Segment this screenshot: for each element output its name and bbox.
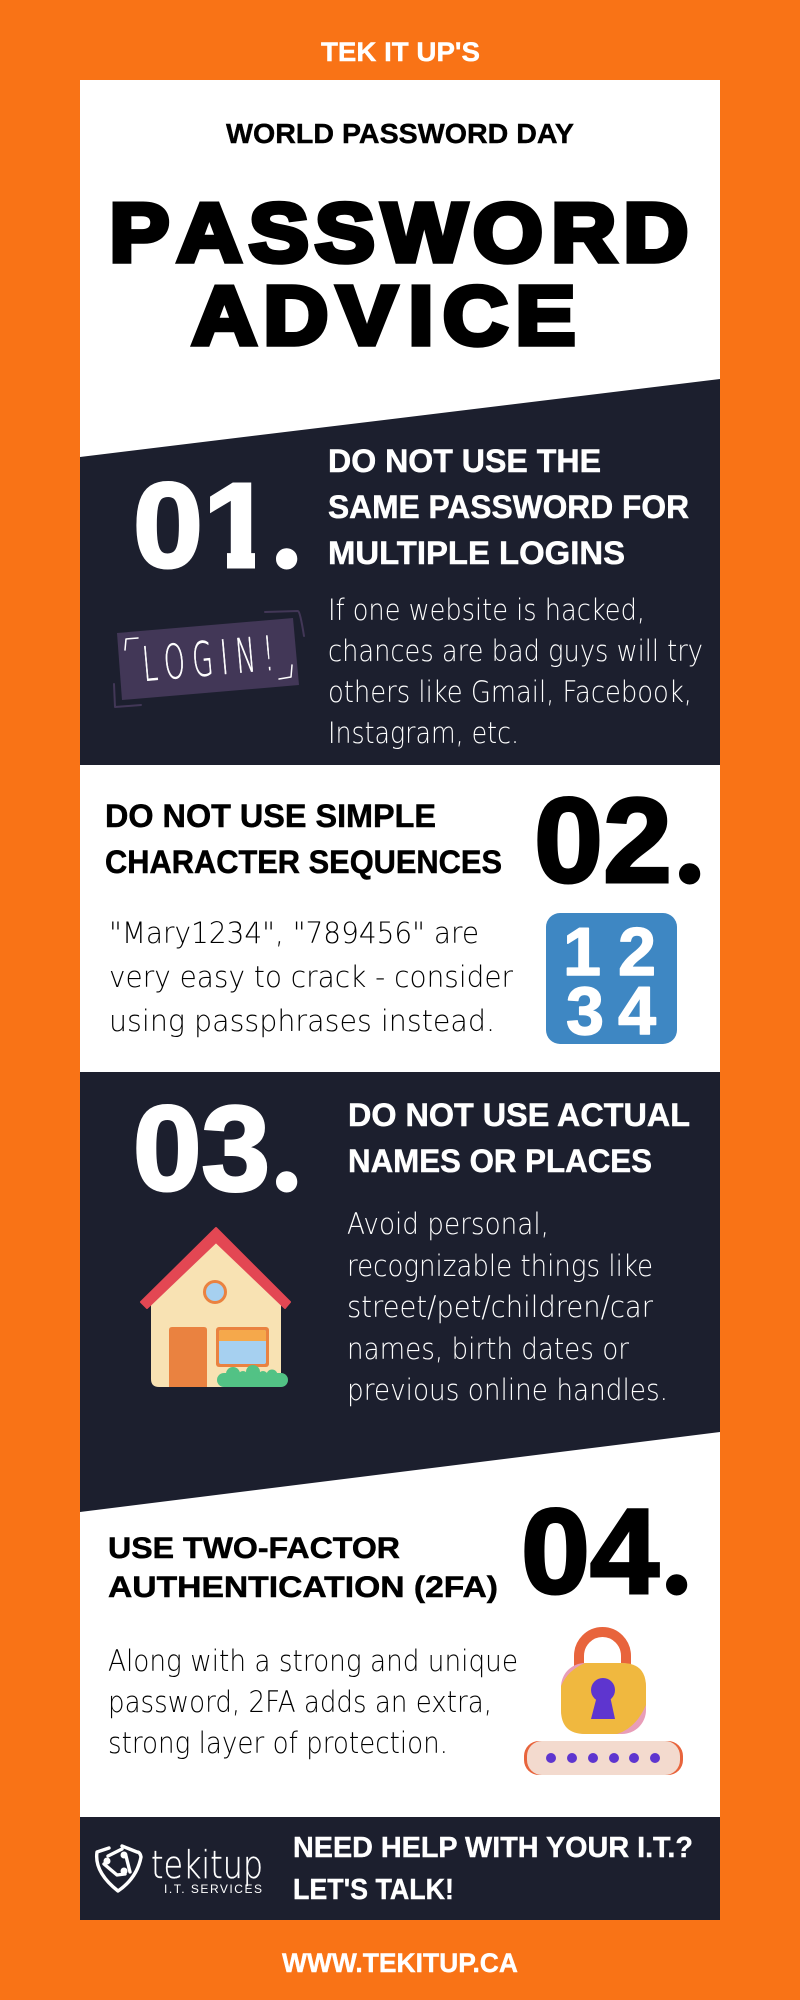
footer call to action: NEED HELP WITH YOUR I.T.?	[293, 1832, 693, 1864]
body 01: others like Gmail, Facebook,	[328, 675, 692, 709]
body 04: password, 2FA adds an extra,	[108, 1685, 492, 1719]
body 03: previous online handles.	[347, 1373, 668, 1407]
icon: padlock and password field	[524, 1632, 683, 1775]
logo: tekitup	[97, 1843, 263, 1896]
heading 04: USE TWO-FACTOR	[108, 1532, 400, 1565]
white main panel	[80, 80, 720, 1920]
number 03: .	[271, 1080, 302, 1218]
body 01: chances are bad guys will try	[328, 634, 703, 668]
heading 02: DO NOT USE SIMPLE	[105, 798, 436, 834]
panel background	[80, 379, 720, 765]
body 02: very easy to crack - consider	[109, 960, 513, 994]
panel background	[80, 1072, 720, 1512]
logo: tekitup: I.T. SERVICES	[164, 1882, 262, 1896]
icon: login sign: LOGIN!	[140, 627, 276, 693]
body 03: Avoid personal,	[347, 1207, 549, 1241]
body 03	[347, 1207, 668, 1407]
icon: house	[141, 1228, 290, 1387]
heading 03: DO NOT USE ACTUAL	[348, 1097, 690, 1133]
number 04: 04	[521, 1483, 659, 1619]
icon: 1234 tile: 1	[563, 914, 601, 990]
number 04: .	[661, 1483, 692, 1621]
panel: tip 01	[80, 379, 720, 765]
panel: tip 03	[80, 1072, 720, 1512]
footer bar	[80, 1817, 720, 1920]
body 04: strong layer of protection.	[108, 1726, 448, 1760]
body 03: recognizable things like	[347, 1249, 653, 1283]
subtitle: WORLD PASSWORD DAY	[226, 118, 574, 149]
bottom website link: WWW.TEKITUP.CA	[282, 1948, 518, 1978]
body 02	[109, 916, 513, 1038]
heading 02	[105, 798, 502, 880]
header block	[110, 118, 688, 362]
icon: login sign	[114, 611, 304, 707]
number 01	[136, 481, 298, 570]
title line 1: PASSWORD	[110, 187, 688, 279]
body 01	[328, 593, 703, 750]
body 04: Along with a strong and unique	[108, 1644, 518, 1678]
number 02: 02	[534, 772, 672, 908]
body 01: Instagram, etc.	[328, 716, 519, 750]
body 01: If one website is hacked,	[328, 593, 645, 627]
heading 01: SAME PASSWORD FOR	[328, 489, 689, 525]
panel: tip 04	[108, 1483, 692, 1775]
number 02: .	[674, 772, 705, 910]
logo: tekitup: tekitup	[151, 1843, 263, 1887]
footer call to action	[293, 1832, 693, 1906]
icon: 1234 tile	[546, 913, 677, 1049]
icon: 1234 tile: 3	[566, 973, 604, 1049]
body 02: using passphrases instead.	[109, 1004, 495, 1038]
icon: 1234 tile: 4	[618, 973, 656, 1049]
heading 01: DO NOT USE THE	[328, 443, 601, 479]
heading 02: CHARACTER SEQUENCES	[105, 844, 502, 880]
body 03: street/pet/children/car	[347, 1290, 653, 1324]
body 03: names, birth dates or	[347, 1332, 629, 1366]
heading 01: MULTIPLE LOGINS	[328, 535, 625, 571]
icon: 1234 tile: 2	[618, 914, 656, 990]
heading 03: NAMES OR PLACES	[348, 1143, 652, 1179]
number 01: .	[271, 457, 302, 595]
body 02: "Mary1234", "789456" are	[109, 916, 479, 950]
number 03: 03	[133, 1080, 270, 1216]
heading 04	[108, 1532, 498, 1604]
top label: brand name: TEK IT UP'S	[321, 37, 480, 67]
heading 01	[328, 443, 689, 571]
heading 03	[348, 1097, 690, 1179]
heading 04: AUTHENTICATION (2FA)	[108, 1571, 498, 1604]
footer call to action: LET'S TALK!	[293, 1874, 454, 1906]
number 01: 01	[133, 457, 273, 593]
panel: tip 02	[105, 772, 705, 1049]
body 04	[108, 1644, 518, 1760]
title line 2: ADVICE	[192, 270, 575, 362]
